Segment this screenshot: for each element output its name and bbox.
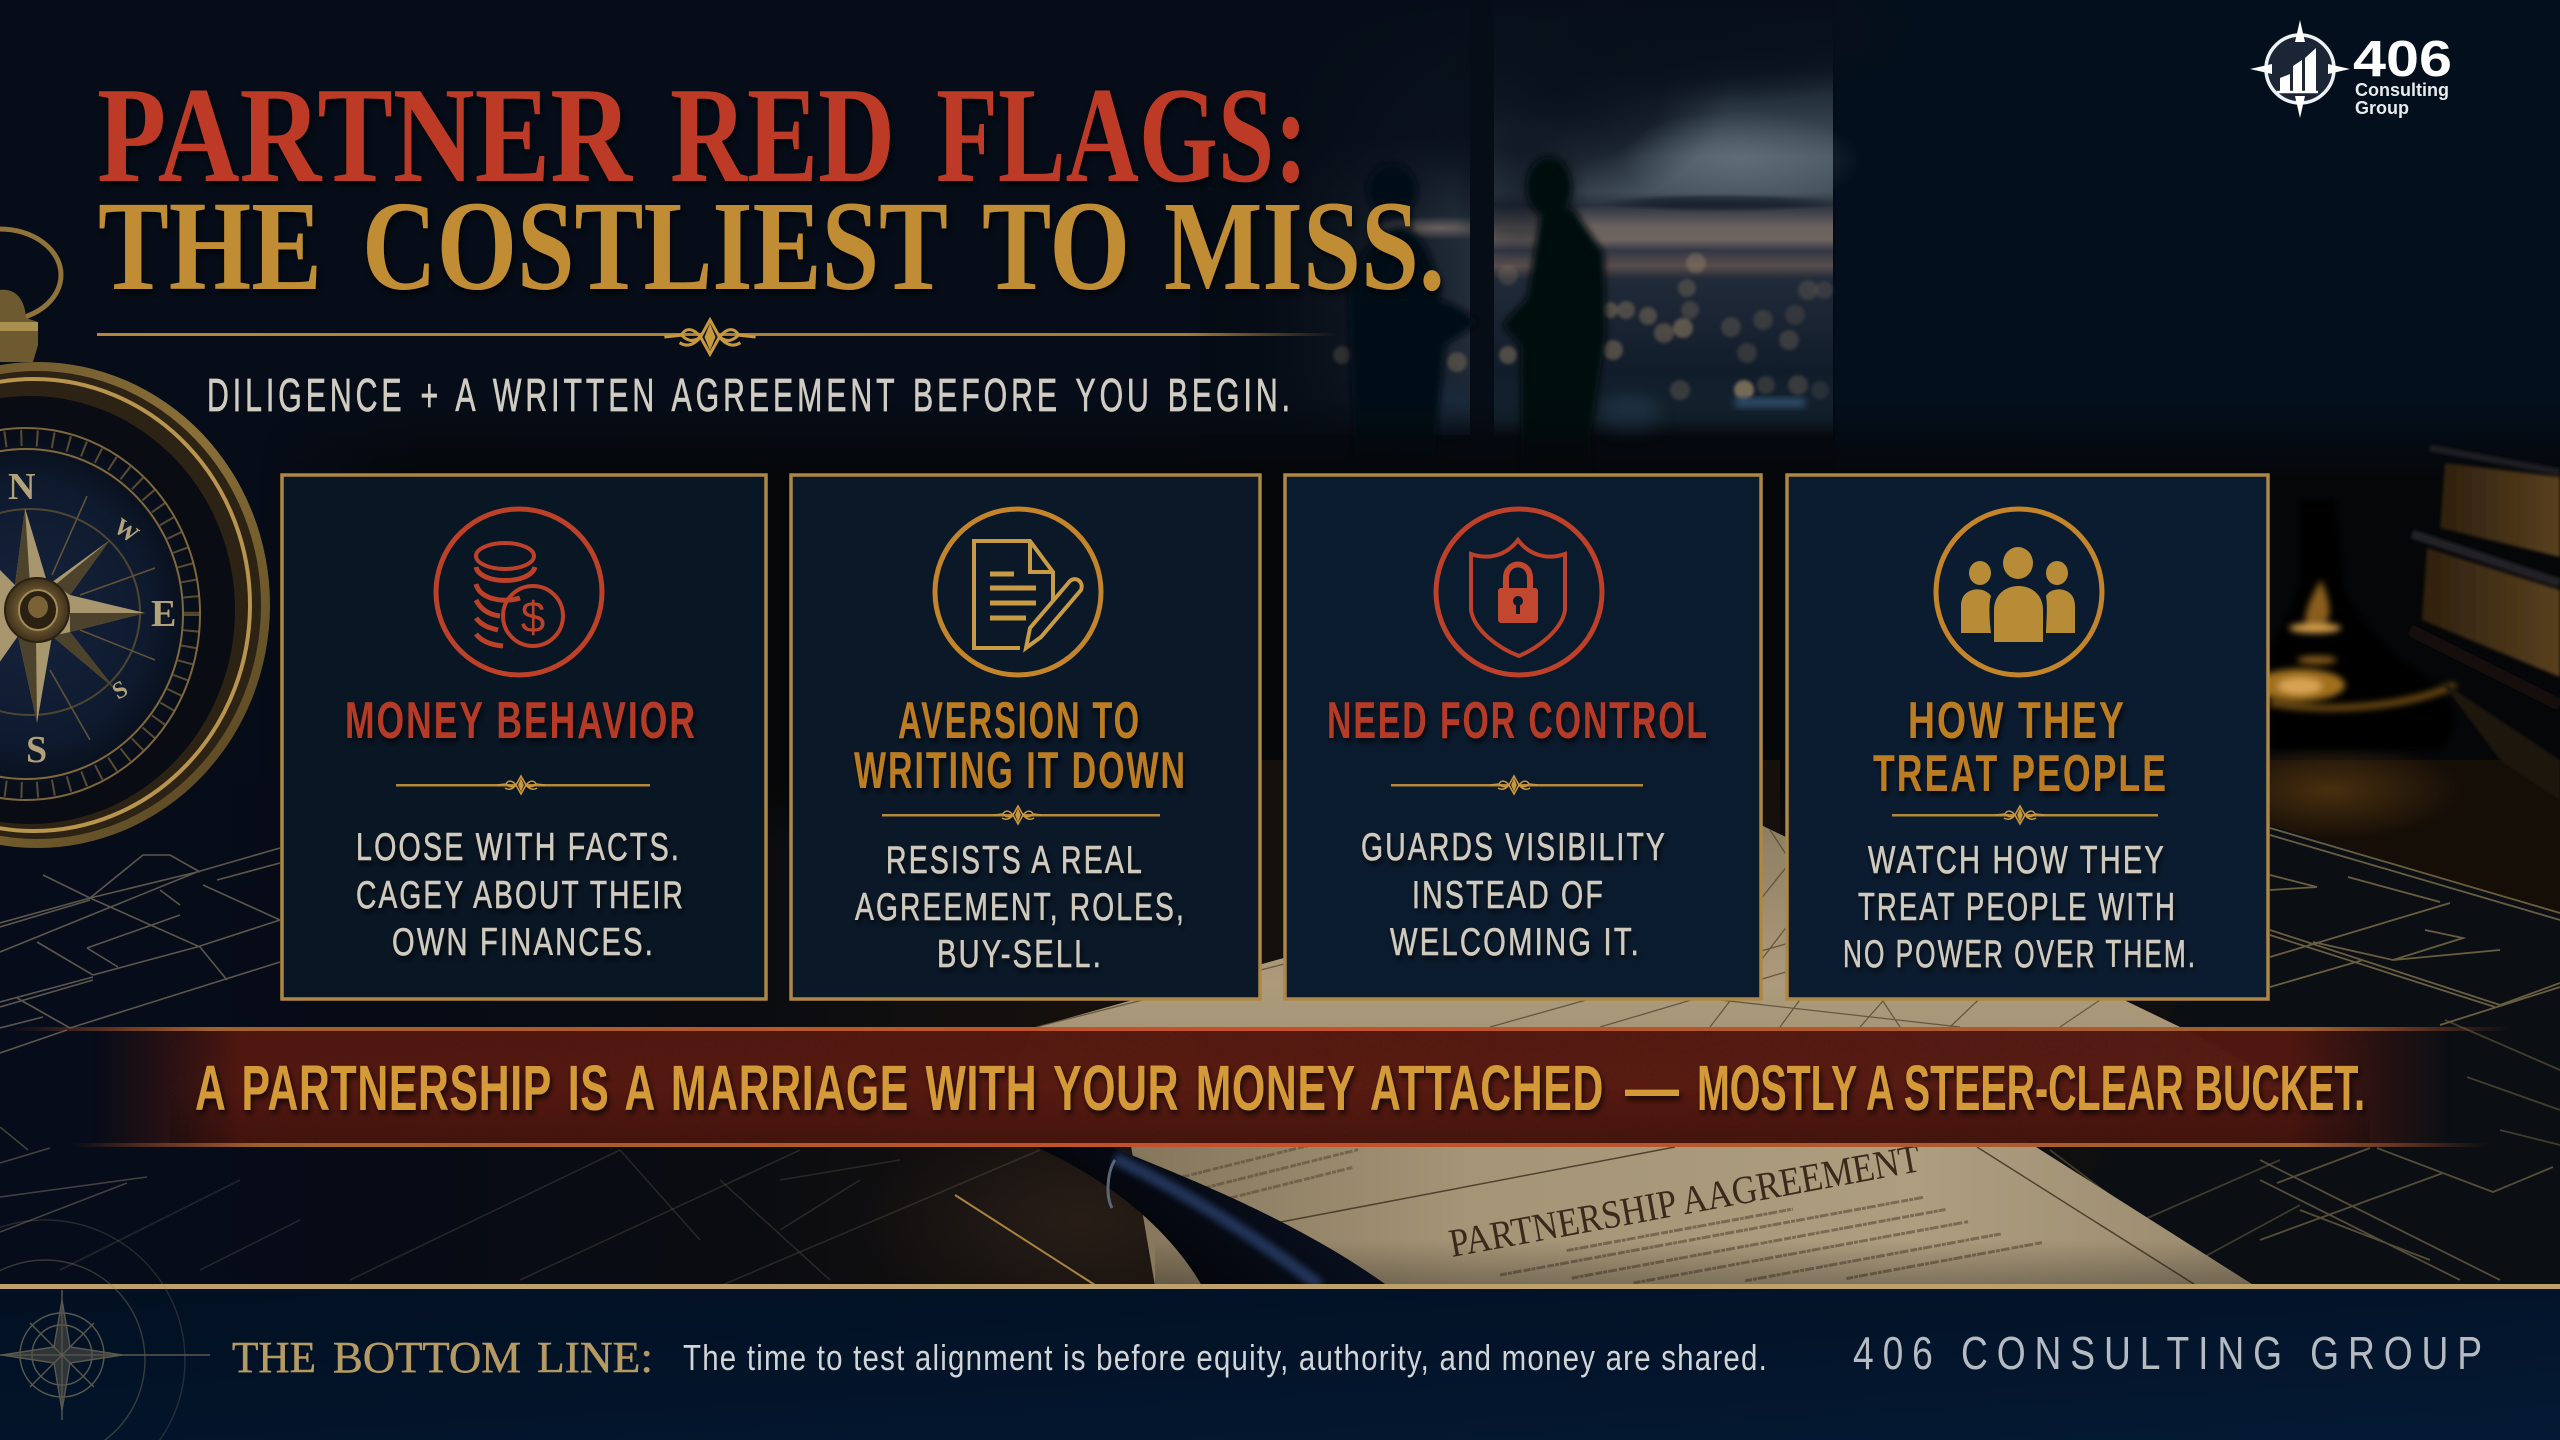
- body text: [356, 826, 685, 964]
- compass letters: E: [151, 593, 176, 635]
- icon: shield with lock: [1436, 509, 1602, 675]
- silhouettes: two partners talking: [1349, 157, 1606, 480]
- body text: WELCOMING IT.: [1390, 921, 1641, 964]
- title line 1: PARTNER: [97, 59, 634, 211]
- title line 2: THE: [98, 175, 322, 317]
- compass ring and crown: [0, 229, 61, 362]
- icon: coins: $: [521, 593, 545, 642]
- compass rose: [0, 508, 145, 723]
- body text: CAGEY ABOUT THEIR: [356, 874, 685, 917]
- logo: 406 Consulting Group: [2250, 20, 2452, 118]
- logo: 406 Consulting Group: Group: [2355, 98, 2409, 118]
- title line 2: MISS.: [1164, 175, 1445, 317]
- title line 1: FLAGS:: [936, 59, 1308, 211]
- window with dusk skyline: [1195, 0, 1930, 440]
- heading: TREAT PEOPLE: [1873, 745, 2168, 803]
- heading: MONEY BEHAVIOR: [345, 692, 697, 750]
- logo mark: [2250, 20, 2350, 118]
- compass letters: S: [26, 729, 47, 771]
- logo wordmark: 406: [2353, 30, 2452, 87]
- title line 1: RED: [670, 59, 895, 211]
- stacked books: [2410, 448, 2560, 800]
- title line 2: COSTLIEST: [362, 175, 948, 317]
- icon: coins: [436, 509, 602, 675]
- compass hub: [5, 578, 69, 642]
- divider: [1391, 776, 1643, 794]
- title line 1: [97, 59, 1308, 211]
- compass: [0, 229, 270, 848]
- icon: document and pen: [935, 509, 1101, 675]
- icon: footer compass watermark: [0, 1220, 210, 1440]
- body text: OWN FINANCES.: [392, 921, 655, 964]
- bottom line label: LINE:: [537, 1333, 653, 1382]
- title line 2: TO: [982, 175, 1130, 317]
- logo: 406 Consulting Group: Consulting: [2355, 80, 2449, 100]
- bottom line label: BOTTOM: [333, 1333, 521, 1382]
- body text: NO POWER OVER THEM.: [1843, 933, 2197, 976]
- banner text: A PARTNERSHIP IS A MARRIAGE WITH YOUR MONEY ATTACHED: [195, 1052, 1604, 1124]
- compass letters: S: [108, 676, 133, 705]
- footer bar: [0, 1220, 2560, 1440]
- banner: key message: [10, 1027, 2510, 1147]
- city bokeh lights: [1333, 253, 1833, 400]
- body text: AGREEMENT, ROLES,: [855, 886, 1186, 929]
- bottom line label: [232, 1333, 653, 1382]
- panel: how they treat people: [1787, 475, 2268, 999]
- body text: GUARDS VISIBILITY: [1361, 826, 1667, 869]
- body text: [1361, 826, 1667, 964]
- panel: aversion to writing it down: [791, 475, 1260, 999]
- icon: three people: [1936, 509, 2102, 675]
- bottom line sentence: The time to test alignment is before equity, authority, and money are shared.: [683, 1337, 1768, 1378]
- divider: [396, 776, 650, 794]
- banner text: —: [1625, 1052, 1679, 1124]
- lamp base: [2255, 500, 2455, 750]
- heading: AVERSION TO: [898, 692, 1141, 750]
- compass body: [0, 362, 270, 848]
- paper: partnership agreement document: [1130, 1132, 2255, 1340]
- fountain pen: [955, 1147, 1388, 1286]
- heading: NEED FOR CONTROL: [1327, 692, 1709, 750]
- body text: TREAT PEOPLE WITH: [1858, 886, 2177, 929]
- panel: need for control: [1285, 475, 1761, 999]
- compass letters: W: [109, 514, 143, 549]
- heading: [1873, 692, 2168, 803]
- body text: LOOSE WITH FACTS.: [356, 826, 681, 869]
- body text: INSTEAD OF: [1412, 874, 1605, 917]
- bottom line label: THE: [232, 1333, 316, 1382]
- body text: [855, 839, 1186, 976]
- body text: RESISTS A REAL: [886, 839, 1144, 882]
- divider: [882, 806, 1160, 824]
- title: [97, 59, 1445, 317]
- body text: [1843, 839, 2197, 976]
- compass letters: N: [8, 466, 35, 508]
- divider: [1892, 806, 2158, 824]
- blueprint lines left: [0, 848, 1040, 1286]
- body text: WATCH HOW THEY: [1868, 839, 2166, 882]
- heading: WRITING IT DOWN: [854, 742, 1187, 800]
- blueprint lines right: [2050, 828, 2560, 1286]
- body text: BUY-SELL.: [937, 933, 1103, 976]
- title line 2: [98, 175, 1445, 317]
- heading: [854, 692, 1187, 800]
- compass letters: [8, 466, 176, 771]
- heading: HOW THEY: [1908, 692, 2126, 750]
- document title: PARTNERSHIP AAGREEMENT: [1446, 1135, 1924, 1266]
- subtitle: DILIGENCE + A WRITTEN AGREEMENT BEFORE YOU BEGIN.: [207, 369, 1294, 421]
- desk surface: [0, 400, 2560, 1330]
- title divider with ornament: [97, 320, 1337, 354]
- panel: money behavior: [282, 475, 766, 999]
- paper: blueprint sheet behind the cards: [1000, 825, 2300, 1090]
